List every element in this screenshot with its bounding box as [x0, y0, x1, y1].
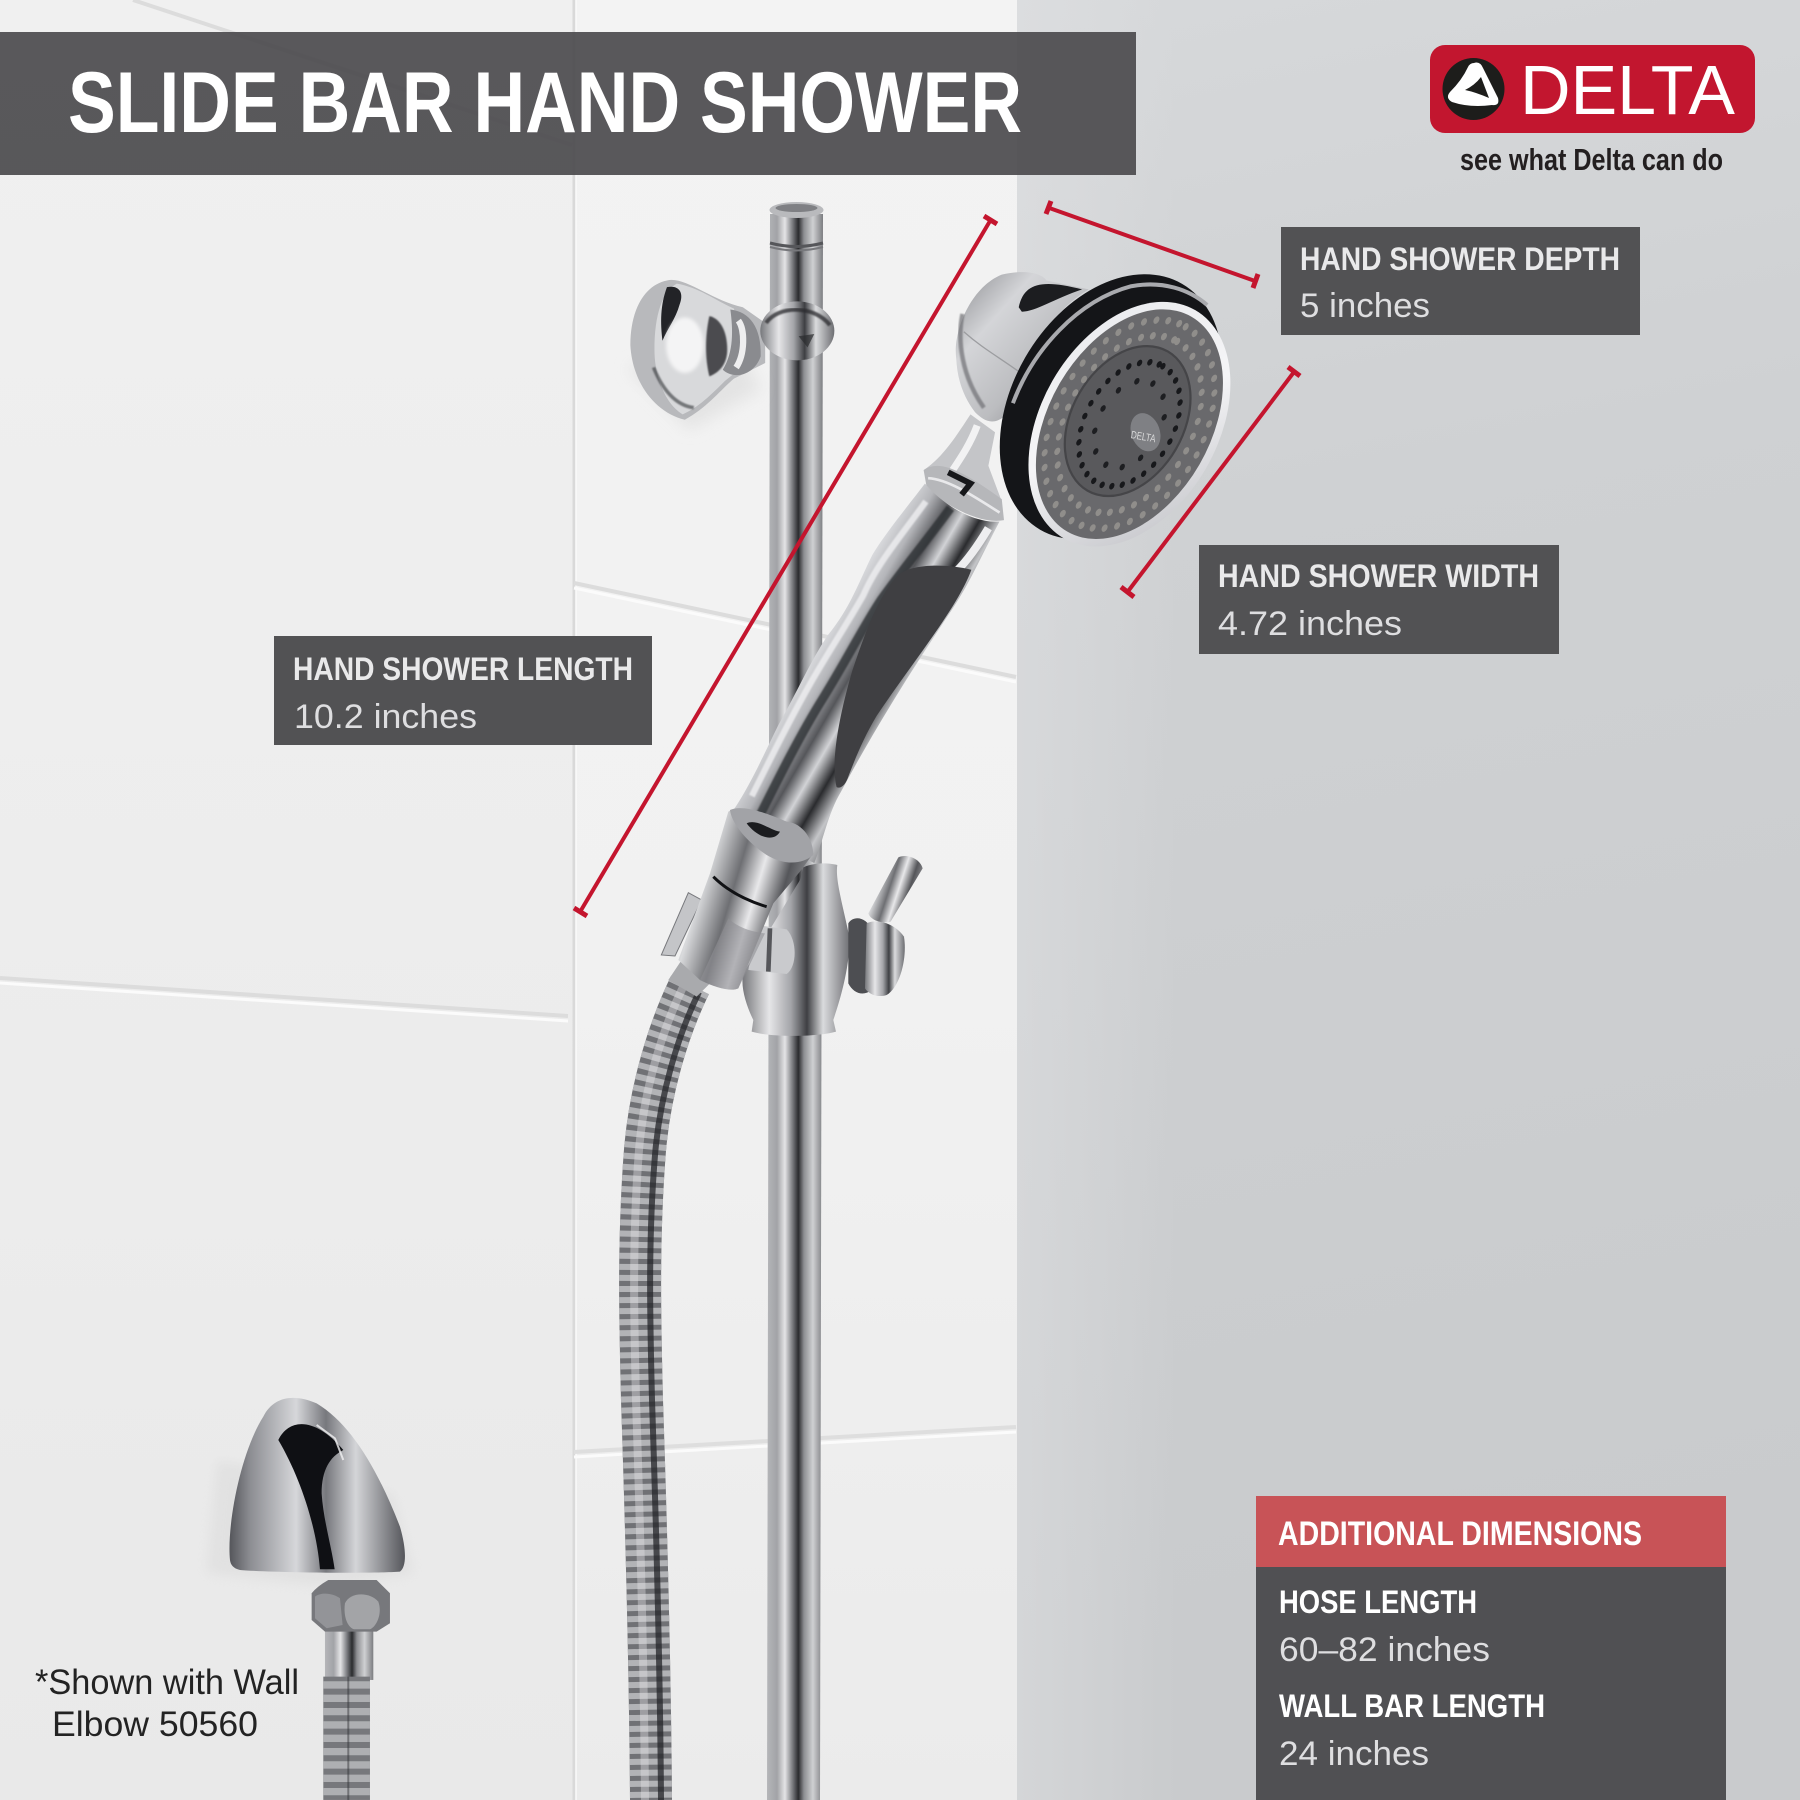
callout: hand shower length: HAND SHOWER LENGTH	[293, 651, 633, 687]
panel heading: ADDITIONAL DIMENSIONS	[1278, 1515, 1642, 1553]
logo: Delta	[1430, 45, 1755, 177]
icon: Delta triangle mark	[1442, 58, 1504, 120]
footnote: *Shown with Wall	[35, 1663, 299, 1702]
lever	[868, 856, 923, 922]
head back body	[956, 272, 1089, 421]
wall bar length: 24 inches	[1279, 1735, 1429, 1773]
wall elbow	[207, 1398, 413, 1800]
handle reflections	[752, 501, 988, 814]
dimension line: hand shower depth	[1046, 201, 1258, 288]
hose	[634, 985, 699, 1800]
callout: hand shower width	[1199, 545, 1559, 654]
panel: additional dimensions	[1256, 1496, 1726, 1800]
rubber grip	[835, 566, 971, 788]
handle neck and collar	[924, 414, 1004, 521]
callout: hand shower depth: 5 inches	[1300, 287, 1430, 325]
dimension line: hand shower length	[574, 216, 997, 916]
callout: hand shower depth	[1281, 227, 1640, 335]
hose length: 60–82 inches	[1279, 1631, 1490, 1669]
handle socket	[730, 808, 813, 863]
footnote	[35, 1663, 299, 1744]
wall bar length	[1279, 1688, 1545, 1773]
title banner	[0, 32, 1136, 175]
sleeve	[678, 810, 813, 990]
tagline: see what Delta can do	[1460, 142, 1723, 177]
hose length: HOSE LENGTH	[1279, 1584, 1477, 1620]
spray face	[987, 266, 1272, 582]
callout: hand shower width: HAND SHOWER WIDTH	[1218, 558, 1539, 594]
hand shower	[729, 234, 1272, 863]
nozzles	[1009, 290, 1249, 558]
callout: hand shower depth: HAND SHOWER DEPTH	[1300, 241, 1620, 277]
wall bar length: WALL BAR LENGTH	[1279, 1688, 1545, 1724]
tab	[661, 893, 702, 956]
hose collar	[668, 960, 710, 997]
wall bracket	[627, 280, 834, 430]
brand on face: DELTA	[1130, 429, 1157, 445]
title: SLIDE BAR HAND SHOWER	[68, 55, 1022, 151]
handle body	[729, 484, 1000, 863]
slider mount	[661, 808, 923, 1036]
footnote: Elbow 50560	[52, 1705, 258, 1744]
central body	[742, 863, 850, 1036]
wordmark: DELTA	[1520, 51, 1735, 129]
slide bar	[767, 202, 824, 1800]
dimension line: hand shower width	[1121, 367, 1300, 597]
right knob	[848, 918, 905, 996]
hose length	[1279, 1584, 1490, 1669]
head rim	[954, 234, 1268, 579]
small joint	[748, 925, 795, 974]
callout: hand shower length	[274, 636, 652, 745]
callout: hand shower width: 4.72 inches	[1218, 605, 1402, 643]
callout: hand shower length: 10.2 inches	[294, 698, 477, 736]
